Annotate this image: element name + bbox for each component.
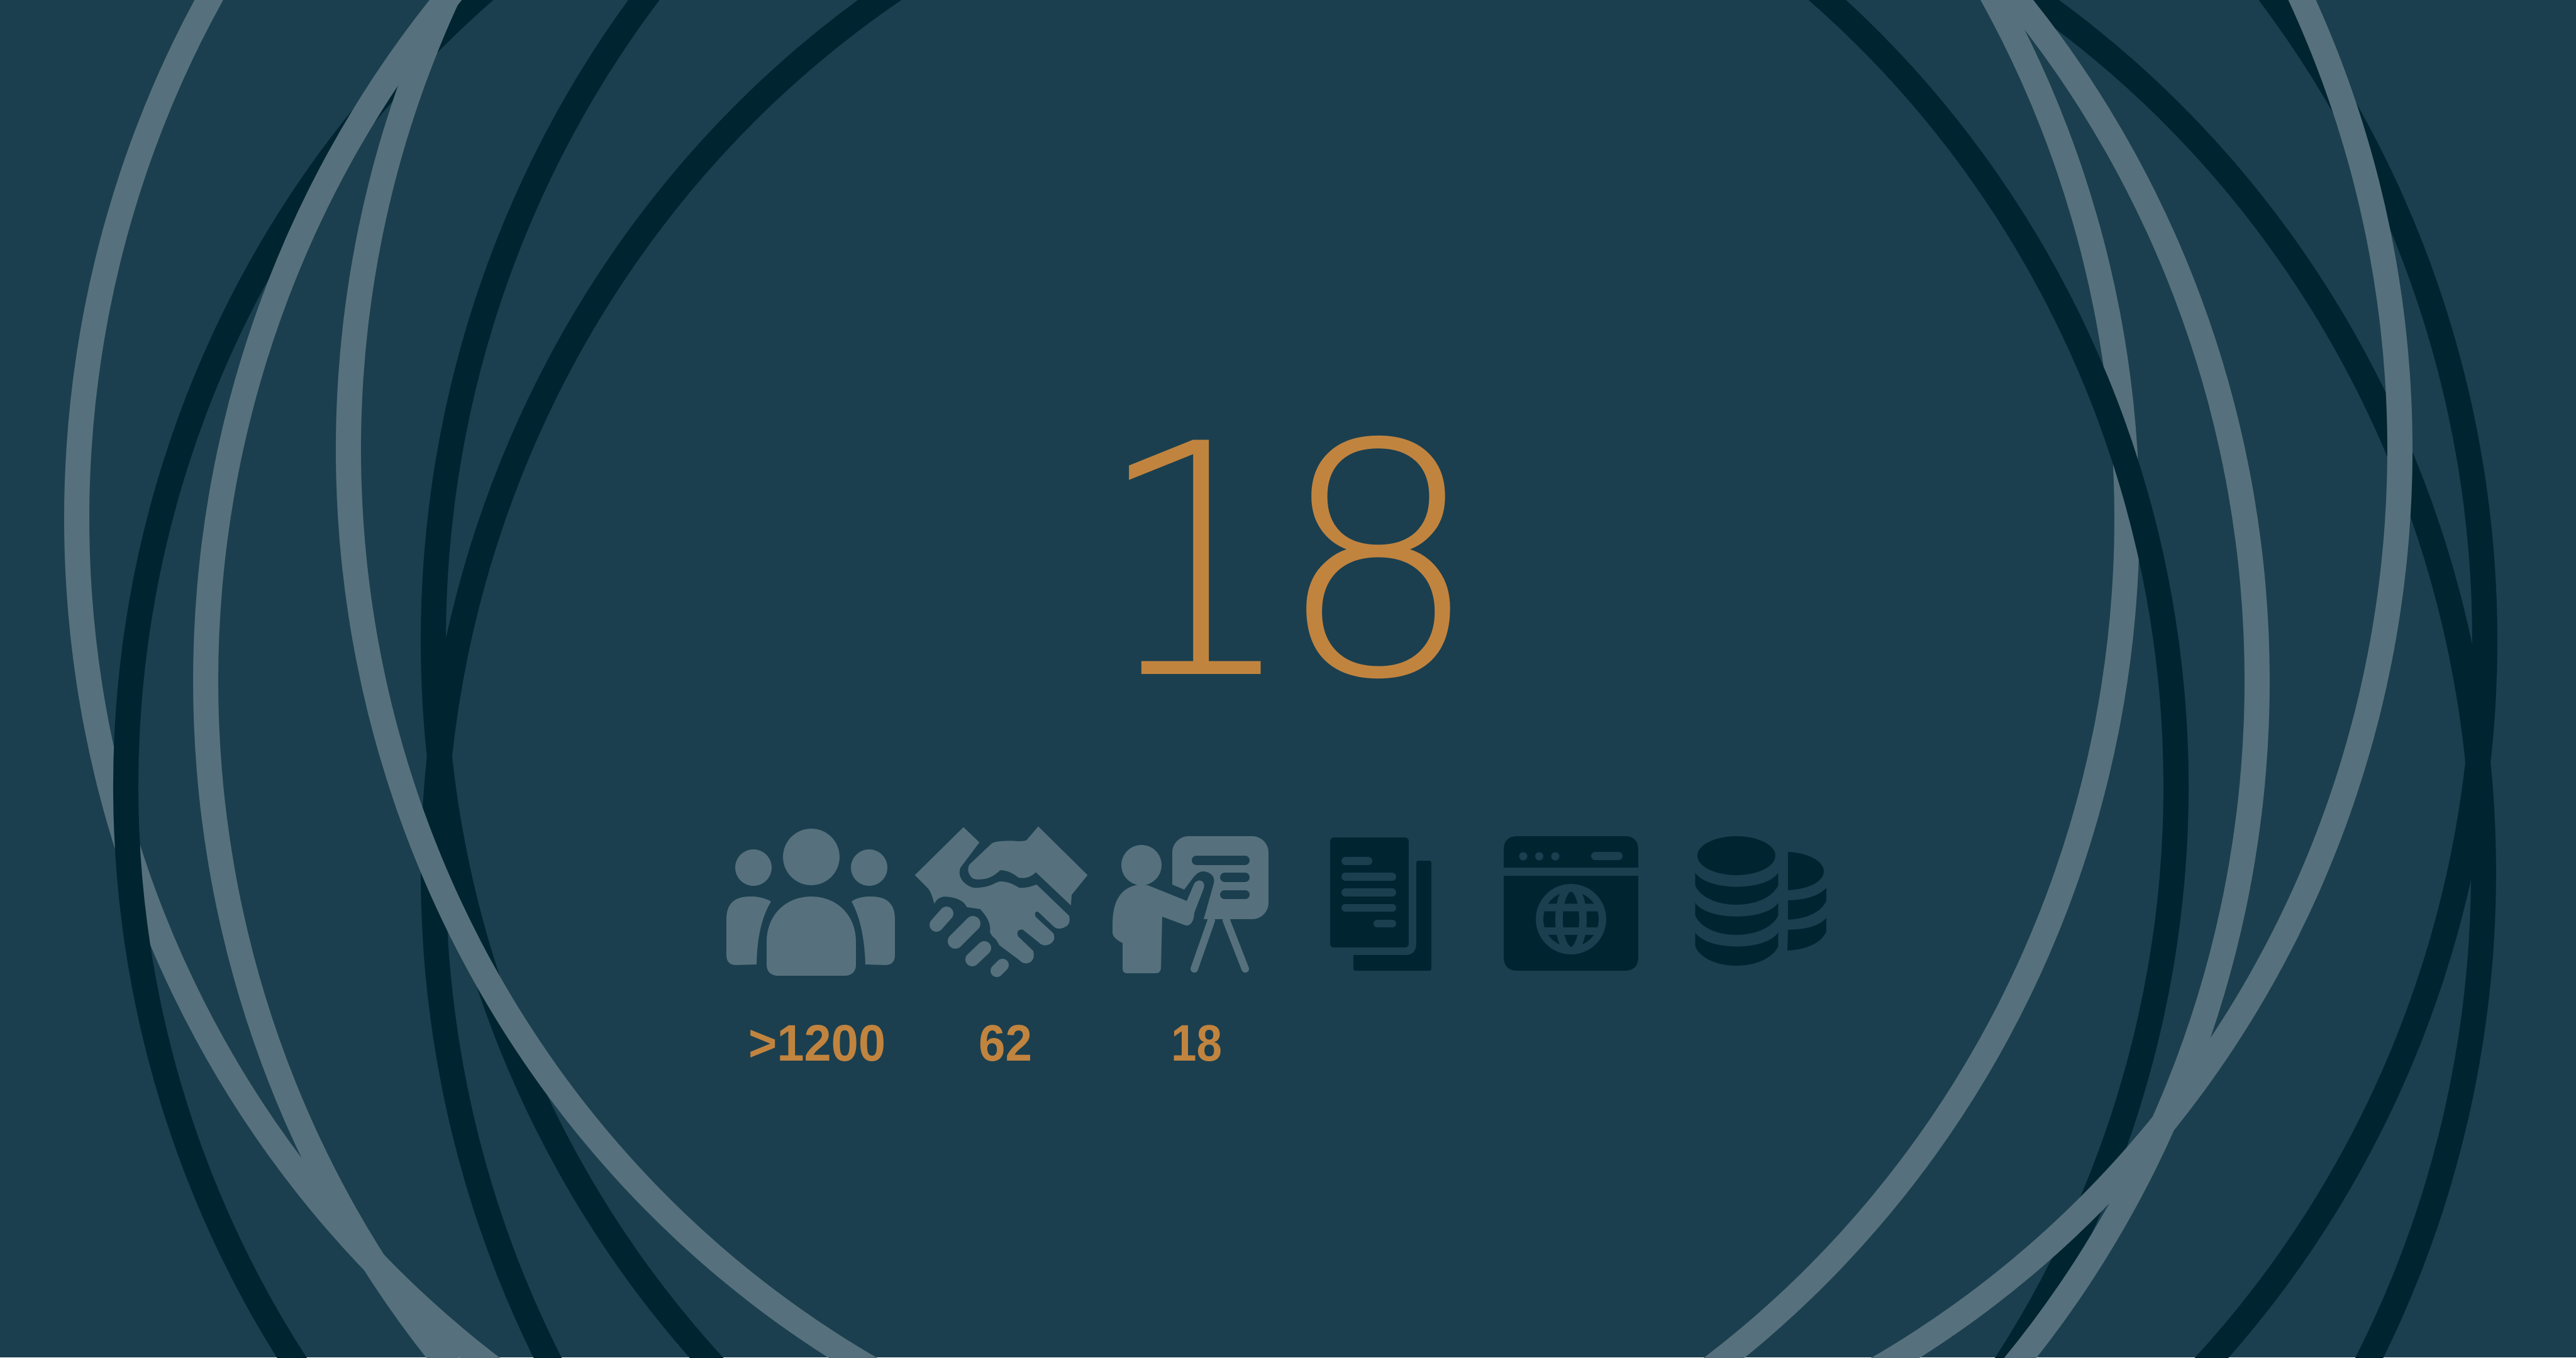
icon: web browser with globe — [1504, 836, 1638, 971]
icon: people group — [726, 829, 895, 976]
icon: documents — [1330, 837, 1431, 971]
label: 18: 18 — [1171, 1015, 1222, 1072]
label: >1200: >1200 — [748, 1015, 886, 1072]
icon: presenter at board — [1113, 836, 1269, 973]
main number: 18 — [1094, 376, 1480, 750]
label: 62: 62 — [979, 1015, 1032, 1072]
icon: database coins — [1696, 836, 1826, 966]
icon: handshake — [916, 827, 1087, 971]
